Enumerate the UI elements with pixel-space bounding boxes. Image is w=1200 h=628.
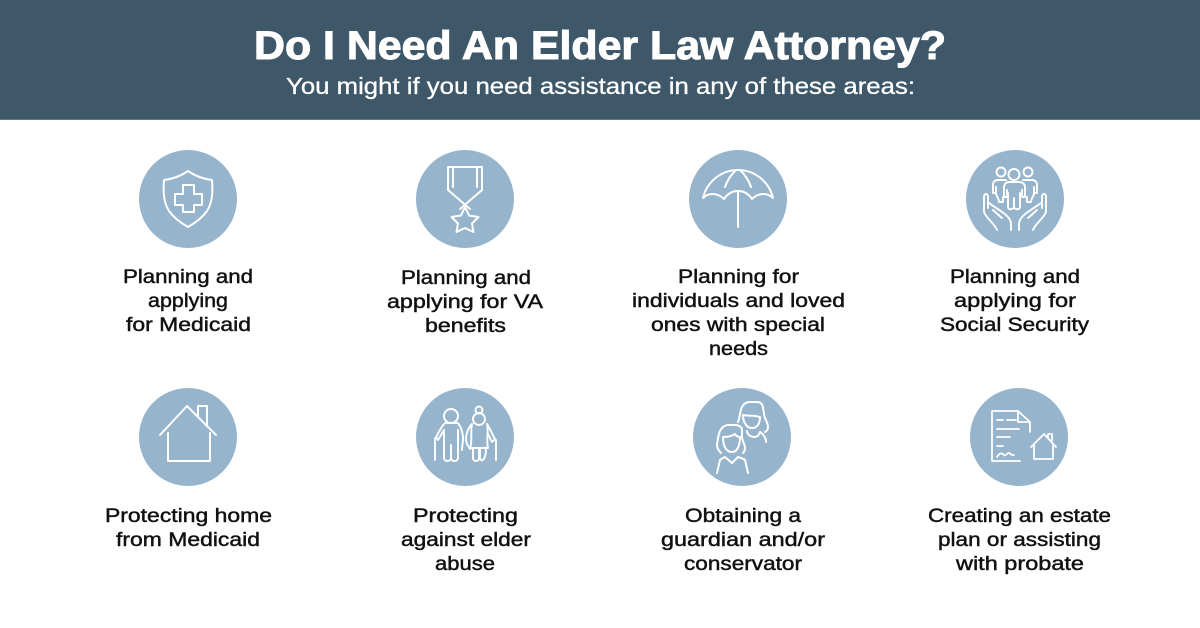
label: applying [148, 290, 228, 312]
label: Protecting [413, 505, 518, 527]
label [928, 505, 1111, 575]
label [105, 505, 272, 551]
label [632, 266, 845, 360]
label: plan or assisting [938, 529, 1101, 551]
label: guardian and/or [661, 529, 826, 551]
label: Planning and [401, 267, 531, 289]
label: Planning and [950, 266, 1080, 288]
icon: house [160, 406, 216, 461]
icon: medal [448, 167, 482, 232]
label: conservator [684, 553, 803, 575]
icon: umbrella [703, 170, 773, 227]
label [940, 266, 1089, 336]
label: Social Security [940, 314, 1089, 336]
label: for Medicaid [126, 314, 251, 336]
panel: Medicaid planning [123, 150, 253, 336]
panel: elder abuse [401, 388, 532, 575]
icon: document and house [992, 411, 1056, 461]
label: Obtaining a [685, 505, 801, 527]
icon: shield with cross [164, 171, 212, 227]
header banner [0, 0, 1200, 120]
panel: estate plan [928, 388, 1111, 575]
label: with probate [955, 553, 1084, 575]
label: against elder [401, 529, 532, 551]
label: needs [709, 338, 768, 360]
panel: Social Security [940, 150, 1089, 336]
label [661, 505, 826, 575]
label: abuse [435, 553, 495, 575]
panel: special needs [632, 150, 845, 360]
label: applying for [954, 290, 1077, 312]
icon: family in hands [984, 168, 1046, 230]
label: Protecting home [105, 505, 272, 527]
label: applying for VA [387, 291, 543, 313]
label: from Medicaid [116, 529, 260, 551]
title: Do I Need An Elder Law Attorney? [254, 24, 946, 68]
panel: protecting home [105, 388, 272, 551]
subtitle: You might if you need assistance in any of these areas: [286, 73, 915, 99]
label [387, 267, 543, 337]
label: benefits [425, 315, 506, 337]
label: ones with special [651, 314, 825, 336]
panel: VA benefits [387, 150, 543, 337]
label: individuals and loved [632, 290, 845, 312]
label [401, 505, 532, 575]
label [123, 266, 253, 336]
icon: two women [717, 402, 768, 473]
label: Planning for [678, 266, 800, 288]
panel: guardian [661, 388, 826, 575]
label: Creating an estate [928, 505, 1111, 527]
label: Planning and [123, 266, 253, 288]
icon: elderly couple [435, 406, 496, 461]
